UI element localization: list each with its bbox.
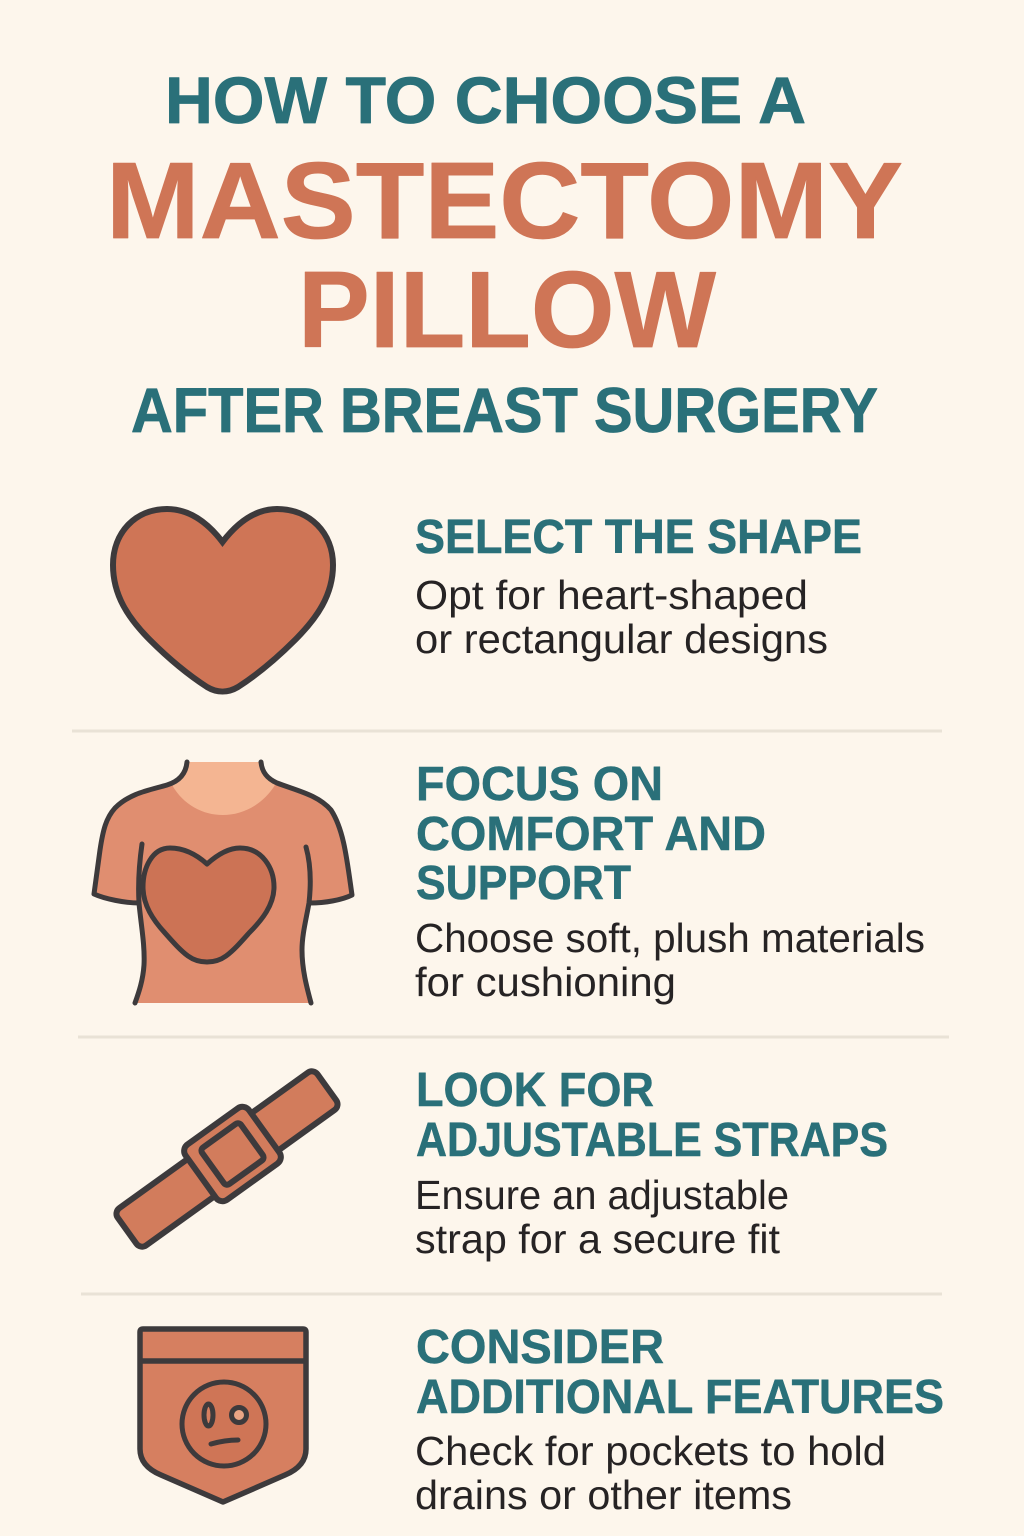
title: AFTER BREAST SURGERY [131,376,878,446]
text: comfort description: for cushioning [415,959,676,1005]
text: select the shape description: or rectangular designs [415,616,828,662]
heading: consider additional features: CONSIDER [416,1321,664,1374]
text: features description [415,1428,886,1518]
text: select the shape description: Opt for heart-shaped [415,572,808,618]
text: select the shape description [415,572,828,662]
text: straps description [415,1172,789,1262]
title: MASTECTOMY [106,140,903,262]
icon: strap with buckle [114,1069,340,1249]
heading: focus on comfort and support: FOCUS ON [416,758,663,811]
title: PILLOW [298,249,716,371]
heading: look for adjustable straps [416,1064,888,1167]
heading: focus on comfort and support: SUPPORT [416,857,631,910]
text: features description: Check for pockets to hold [415,1428,886,1474]
heading: select the shape: SELECT THE SHAPE [415,511,862,564]
heading: consider additional features: ADDITIONAL FEATURES [416,1371,944,1424]
icon: torso with heart pillow [94,762,352,1003]
icon: heart [113,509,333,692]
panel: additional features [140,1321,944,1518]
title [106,63,903,446]
heading: focus on comfort and support: COMFORT AND [416,808,766,861]
panel: comfort and support [94,758,925,1005]
title: HOW TO CHOOSE A [165,63,806,137]
heading: look for adjustable straps: LOOK FOR [416,1064,654,1117]
text: straps description: Ensure an adjustable [415,1172,789,1218]
panel: adjustable straps [114,1064,888,1262]
heading: consider additional features [416,1321,944,1424]
text: comfort description [415,915,925,1005]
heading: focus on comfort and support [416,758,766,910]
icon: pocket with face [140,1329,306,1502]
text: features description: drains or other items [415,1472,792,1518]
panel: select the shape [113,509,862,692]
text: comfort description: Choose soft, plush materials [415,915,925,961]
text: straps description: strap for a secure fit [415,1216,781,1262]
heading: look for adjustable straps: ADJUSTABLE STRAPS [416,1114,888,1167]
